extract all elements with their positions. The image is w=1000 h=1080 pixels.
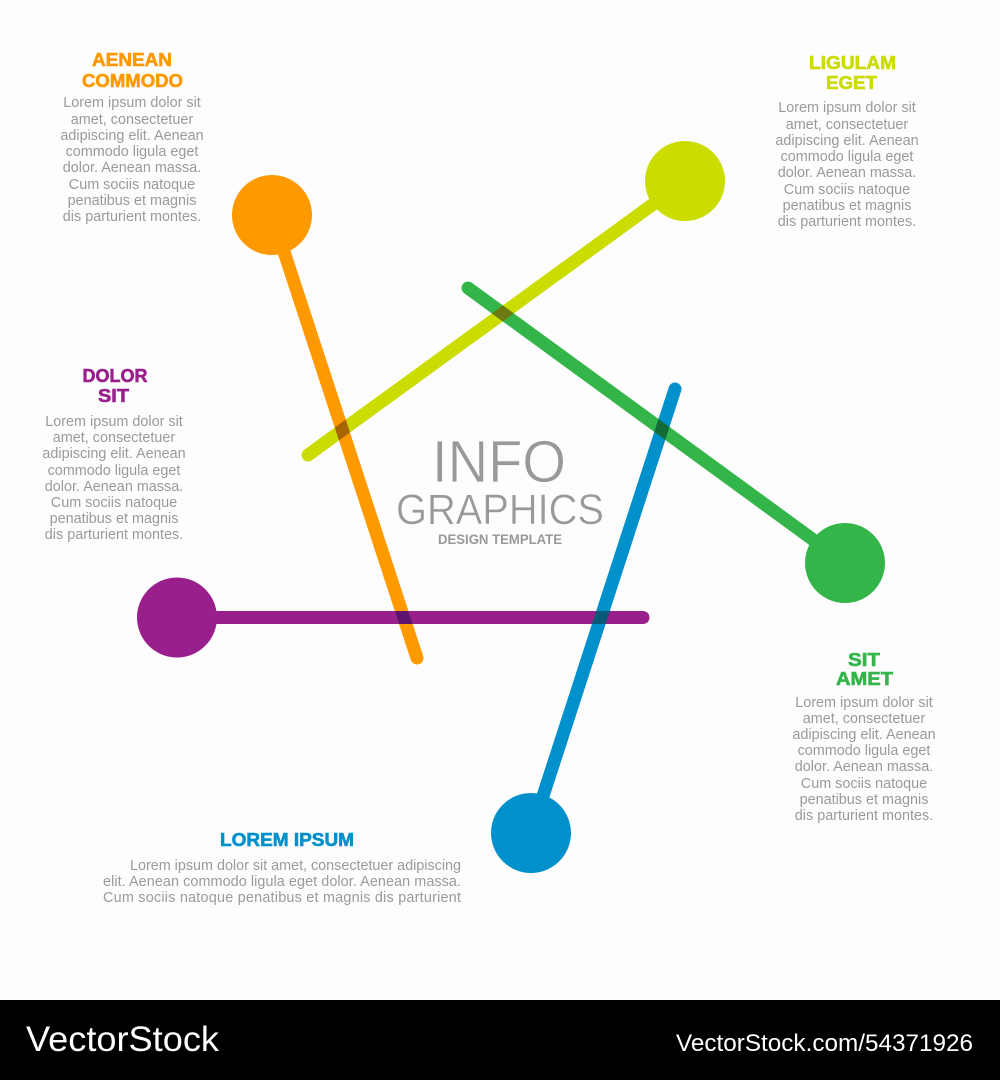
text block: ligulam eget: EGET <box>826 73 877 93</box>
text block: lorem ipsum <box>103 830 461 906</box>
text block: ligulam eget: Lorem ipsum dolor sit <box>778 100 916 116</box>
text block: ligulam eget: penatibus et magnis <box>783 198 911 214</box>
text block: aenean commodo: amet, consectetuer <box>71 112 193 128</box>
crossing: blue over purple <box>592 611 610 624</box>
text block: ligulam eget: dolor. Aenean massa. <box>778 165 916 181</box>
text block: aenean commodo <box>60 50 204 225</box>
text block: sit amet: penatibus et magnis <box>800 792 928 808</box>
text block: ligulam eget: LIGULAM <box>809 53 896 73</box>
text block: dolor sit: commodo ligula eget <box>48 463 180 479</box>
text block: lorem ipsum: Cum sociis natoque penatibus et magnis dis parturient <box>103 890 461 906</box>
text block: lorem ipsum: elit. Aenean commodo ligula eget dolor. Aenean massa. <box>103 874 461 890</box>
text block: aenean commodo: Cum sociis natoque <box>69 177 195 193</box>
heading: info graphics: INFO <box>432 429 566 495</box>
text block: lorem ipsum: LOREM IPSUM <box>220 830 354 850</box>
text block: aenean commodo: AENEAN <box>92 50 172 70</box>
crossing: lime over green <box>492 305 514 322</box>
heading: info graphics: DESIGN TEMPLATE <box>438 532 562 547</box>
text block: dolor sit <box>42 366 186 543</box>
text block: sit amet: dis parturient montes. <box>795 808 933 824</box>
text block: dolor sit: dolor. Aenean massa. <box>45 479 183 495</box>
text block: sit amet <box>792 650 936 824</box>
text block: ligulam eget: adipiscing elit. Aenean <box>775 133 919 149</box>
text block: ligulam eget <box>775 53 919 230</box>
pin: purple <box>137 578 643 658</box>
text block: aenean commodo: dolor. Aenean massa. <box>63 160 201 176</box>
crossing: purple over orange <box>394 611 413 624</box>
footer bar: VectorStock.com/54371926 <box>676 1030 973 1057</box>
text block: dolor sit: Cum sociis natoque <box>51 495 177 511</box>
pin: orange <box>232 175 417 658</box>
text block: ligulam eget: Cum sociis natoque <box>784 182 910 198</box>
heading: info graphics <box>396 429 604 547</box>
text block: aenean commodo: penatibus et magnis <box>68 193 196 209</box>
text block: sit amet: Cum sociis natoque <box>801 776 927 792</box>
text block: dolor sit: penatibus et magnis <box>50 511 178 527</box>
pin: blue <box>491 389 675 873</box>
text block: sit amet: Lorem ipsum dolor sit <box>795 695 933 711</box>
heading: info graphics: GRAPHICS <box>396 486 604 534</box>
footer bar <box>0 1000 1000 1080</box>
text block: aenean commodo: Lorem ipsum dolor sit <box>63 95 201 111</box>
crossing: orange over lime <box>334 420 350 440</box>
text block: ligulam eget: amet, consectetuer <box>786 117 908 133</box>
text block: dolor sit: SIT <box>98 386 129 406</box>
text block: aenean commodo: adipiscing elit. Aenean <box>60 128 204 144</box>
text block: dolor sit: adipiscing elit. Aenean <box>42 446 186 462</box>
text block: sit amet: AMET <box>836 669 893 689</box>
text block: aenean commodo: dis parturient montes. <box>63 209 201 225</box>
text block: sit amet: commodo ligula eget <box>798 743 930 759</box>
text block: sit amet: dolor. Aenean massa. <box>795 759 933 775</box>
text block: ligulam eget: dis parturient montes. <box>778 214 916 230</box>
text block: sit amet: adipiscing elit. Aenean <box>792 727 936 743</box>
text block: ligulam eget: commodo ligula eget <box>781 149 913 165</box>
text block: dolor sit: dis parturient montes. <box>45 527 183 543</box>
text block: aenean commodo: COMMODO <box>82 71 183 91</box>
pin: lime <box>308 141 725 455</box>
text block: sit amet: SIT <box>848 650 880 670</box>
footer bar: VectorStock <box>26 1020 220 1059</box>
crossing: green over blue <box>654 419 670 440</box>
text block: dolor sit: DOLOR <box>82 366 148 386</box>
text block: sit amet: amet, consectetuer <box>803 711 925 727</box>
text block: aenean commodo: commodo ligula eget <box>66 144 198 160</box>
text block: dolor sit: amet, consectetuer <box>53 430 175 446</box>
pin: green <box>468 288 885 603</box>
text block: dolor sit: Lorem ipsum dolor sit <box>45 414 183 430</box>
text block: lorem ipsum: Lorem ipsum dolor sit amet, consectetuer adipiscing <box>130 858 461 874</box>
